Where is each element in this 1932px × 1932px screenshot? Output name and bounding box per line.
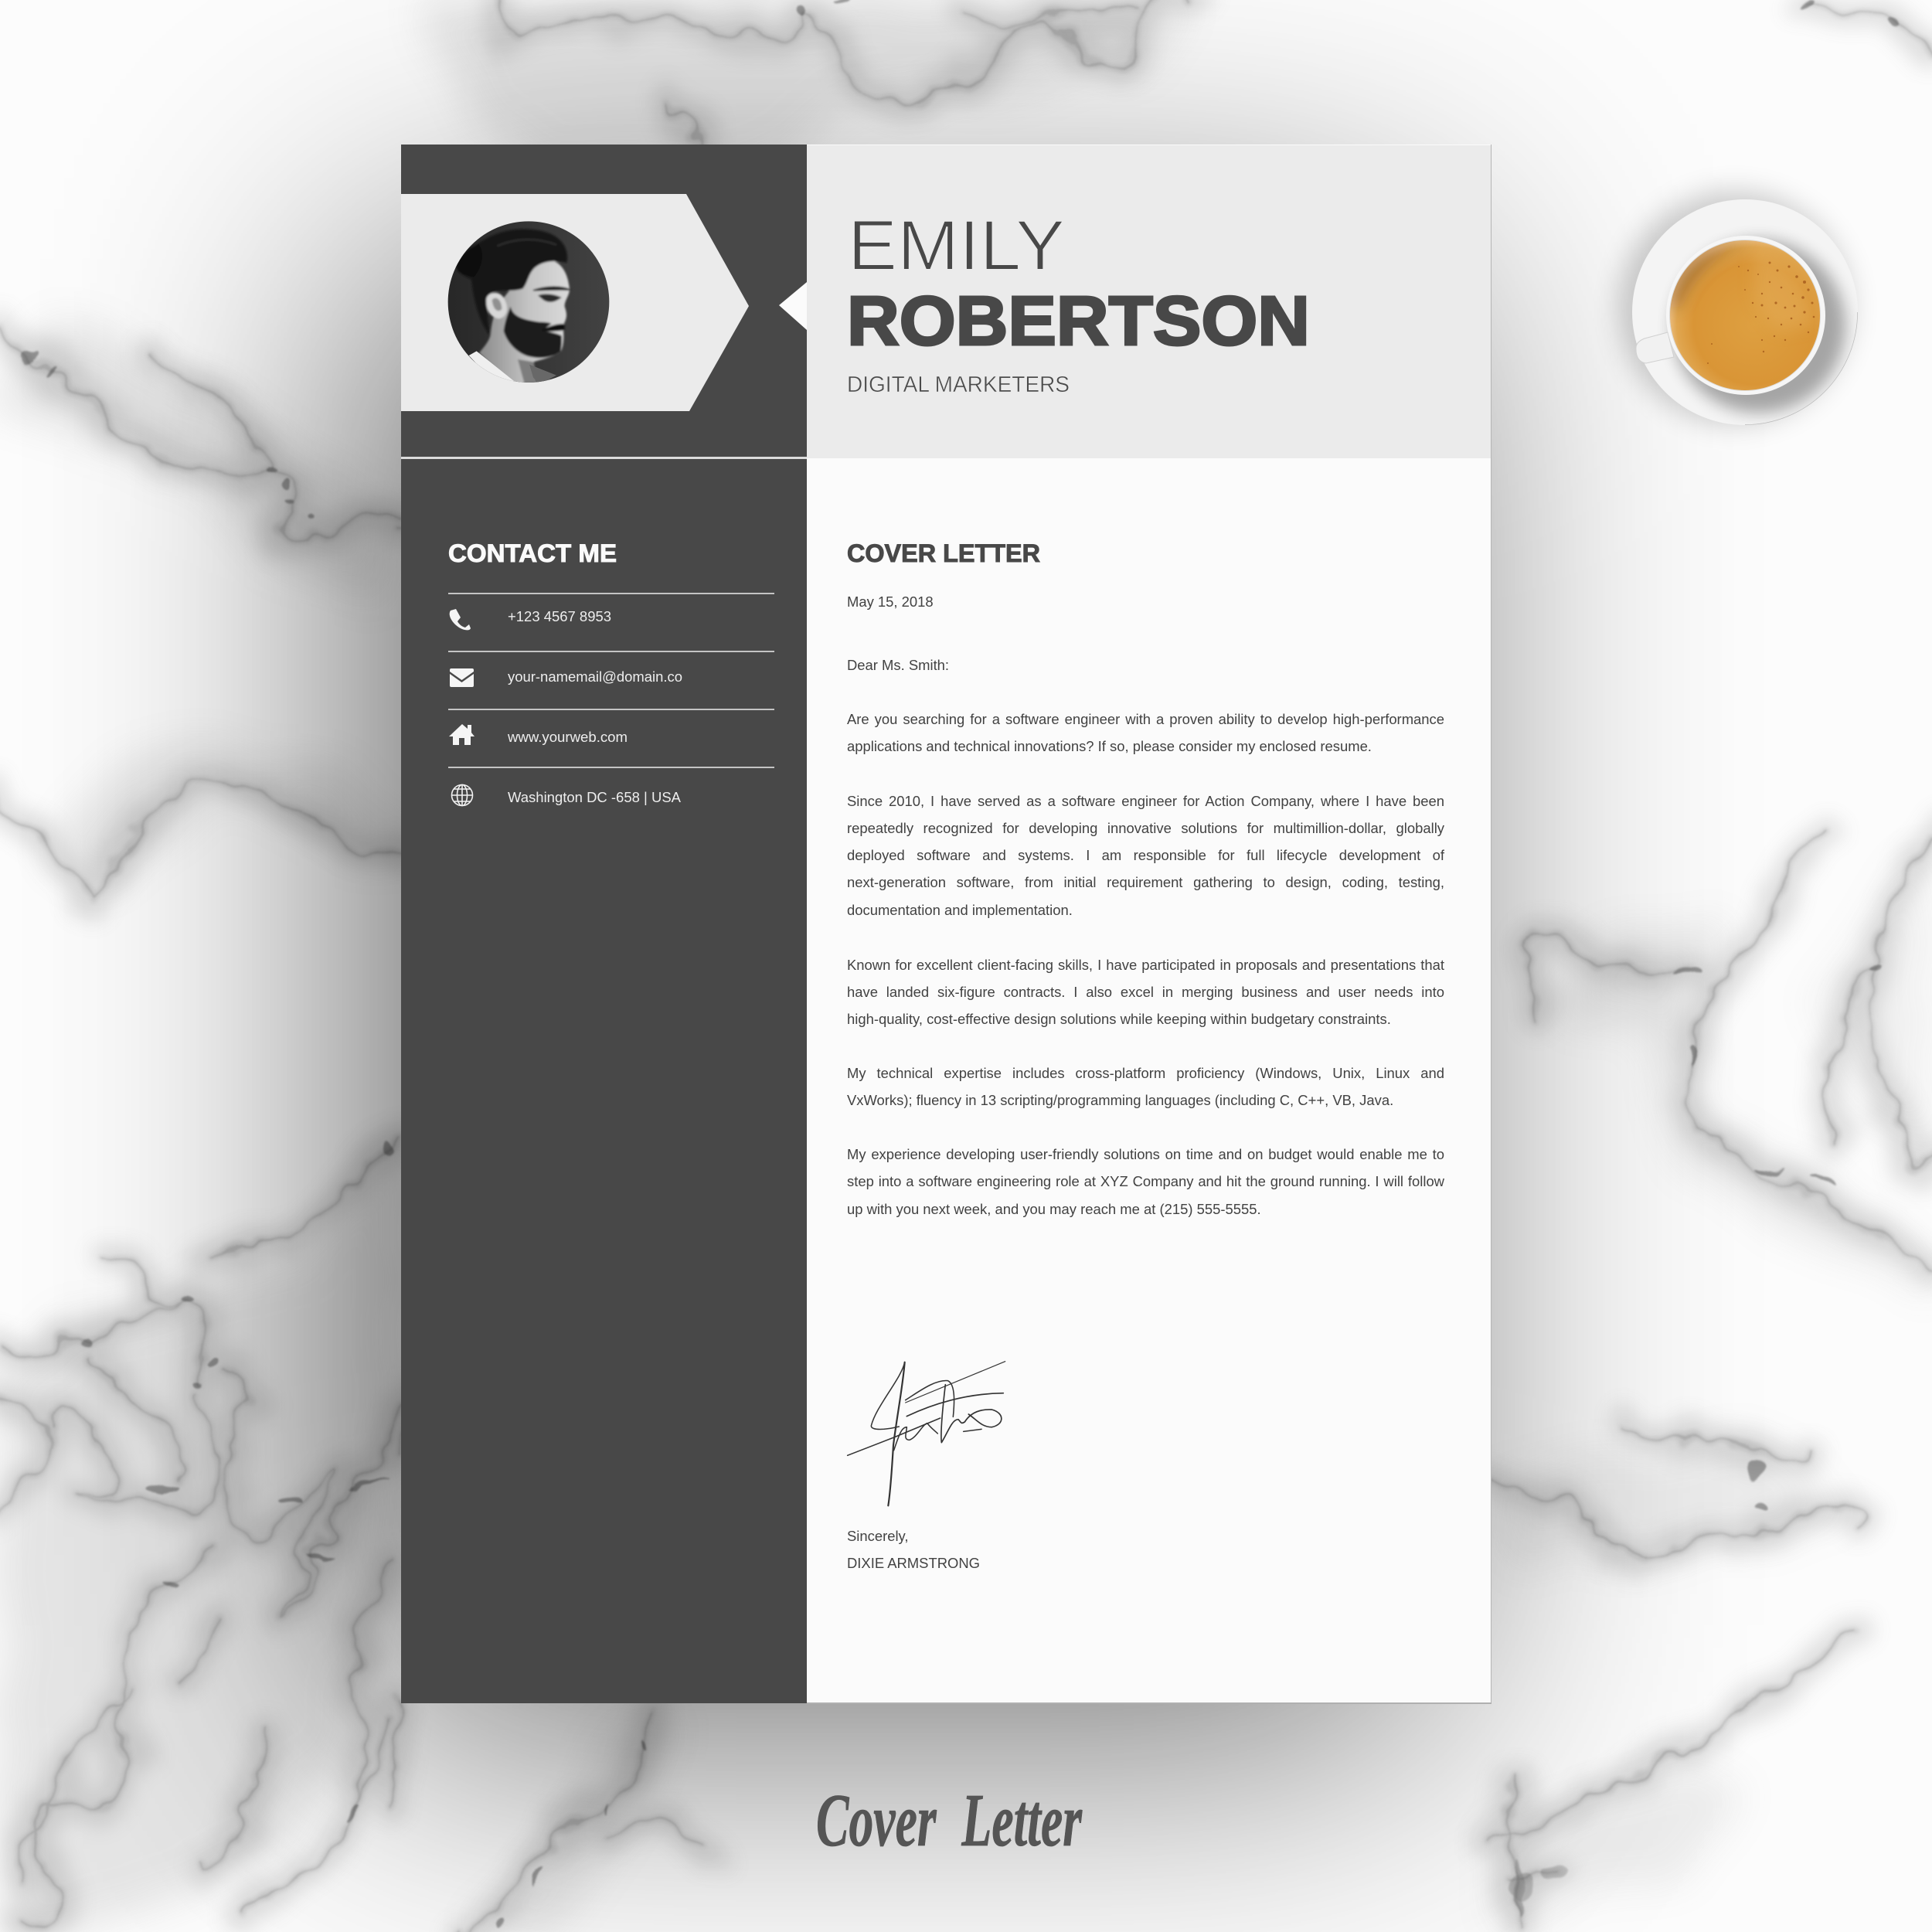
paragraph 3: high-quality, cost-effective design solutions while keeping within budgetary constraints. bbox=[847, 1011, 1391, 1027]
icon: phone bbox=[450, 609, 471, 630]
icon: envelope bbox=[450, 668, 474, 687]
text: date: May 15, 2018 bbox=[847, 594, 934, 610]
paragraph 1: Are you searching for a software engineer with a proven ability to develop high-performance bbox=[847, 711, 1444, 727]
text: sign-off bbox=[847, 1522, 1444, 1577]
icon: house bbox=[449, 724, 474, 745]
paragraph 2: repeatedly recognized for developing innovative solutions for multimillion-dollar, globally bbox=[847, 820, 1444, 836]
text: sign-off: DIXIE ARMSTRONG bbox=[847, 1555, 980, 1571]
icon: globe bbox=[451, 785, 473, 805]
icon: coffee cup on saucer bbox=[1619, 192, 1858, 425]
cup handle bbox=[1636, 332, 1674, 363]
text: sign-off: Sincerely, bbox=[847, 1528, 909, 1544]
paragraph 4: My technical expertise includes cross-platform proficiency (Windows, Unix, Linux and bbox=[847, 1065, 1444, 1081]
footer script title: Cover Letter bbox=[816, 1779, 1083, 1862]
paragraph 5: My experience developing user-friendly solutions on time and on budget would enable me to bbox=[847, 1146, 1444, 1162]
contact: website: www.yourweb.com bbox=[507, 729, 628, 745]
neck and face bbox=[479, 259, 570, 388]
paragraph 5: up with you next week, and you may reach me at (215) 555-5555. bbox=[847, 1201, 1261, 1216]
portrait photo bbox=[448, 221, 609, 383]
paragraph 2: deployed software and systems. I am responsible for full lifecycle development of bbox=[847, 847, 1444, 863]
paragraph 3 bbox=[847, 951, 1444, 1032]
name: surname: ROBERTSON bbox=[847, 283, 1310, 360]
name: first name: EMILY bbox=[848, 206, 1065, 285]
contact: email: your-namemail@domain.co bbox=[508, 668, 682, 685]
paragraph 2: documentation and implementation. bbox=[847, 901, 1073, 918]
paragraph 2: Since 2010, I have served as a software engineer for Action Company, where I have been bbox=[847, 793, 1444, 808]
signature bbox=[848, 1362, 1005, 1505]
document drop shadow bbox=[363, 258, 1423, 1728]
job title: DIGITAL MARKETERS bbox=[847, 372, 1070, 397]
paragraph 1 bbox=[847, 711, 1444, 754]
white shirt bbox=[469, 351, 519, 393]
paragraph 1: applications and technical innovations? If so, please consider my enclosed resume. bbox=[847, 738, 1372, 754]
eyebrow and eye bbox=[533, 287, 570, 291]
heading: cover letter: COVER LETTER bbox=[847, 539, 1040, 567]
panel: header band bbox=[807, 145, 1491, 458]
panel: resume page bbox=[401, 145, 1492, 1704]
ear bbox=[486, 293, 507, 318]
contact: phone number: +123 4567 8953 bbox=[508, 608, 611, 624]
hair bbox=[456, 229, 567, 336]
paragraph 3: have landed six-figure contracts. I also excel in merging business and user needs into bbox=[847, 984, 1444, 1000]
contact: address: Washington DC -658 | USA bbox=[508, 789, 682, 805]
paragraph 5: step into a software engineering role at XYZ Company and hit the ground running. I will follow bbox=[847, 1173, 1444, 1189]
paragraph 2 bbox=[847, 793, 1444, 918]
paragraph 4: VxWorks); fluency in 13 scripting/programming languages (including C, C++, VB, Java. bbox=[847, 1092, 1393, 1108]
paragraph 5 bbox=[847, 1141, 1444, 1223]
panel: dark sidebar bbox=[401, 145, 807, 1703]
photo hexagon panel bbox=[401, 194, 749, 411]
notch arrow bbox=[779, 282, 807, 330]
beard bbox=[504, 307, 562, 358]
paragraph 4 bbox=[847, 1060, 1444, 1114]
paragraph 2: next-generation software, from initial requirement gathering to design, coding, testing, bbox=[847, 874, 1444, 890]
heading: contact me: CONTACT ME bbox=[448, 539, 617, 567]
text: salutation: Dear Ms. Smith: bbox=[847, 657, 949, 673]
paragraph 3: Known for excellent client-facing skills, I have participated in proposals and presentations that bbox=[847, 957, 1444, 972]
